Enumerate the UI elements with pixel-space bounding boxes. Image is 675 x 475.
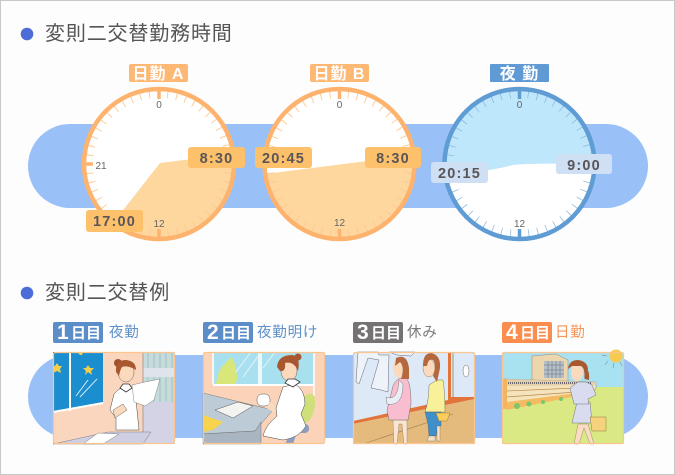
clock: day shift B: 12 xyxy=(334,218,345,229)
day 4 label: 4 xyxy=(506,321,518,344)
clock: day shift A: 日勤 A xyxy=(132,64,185,83)
heading: shift hours: 変則二交替勤務時間 xyxy=(45,22,233,45)
clock: day shift A: 12 xyxy=(153,219,165,230)
day 3 label: 日目 xyxy=(371,325,401,342)
day 2 label: 日目 xyxy=(221,325,251,342)
clock: night shift: 12 xyxy=(514,219,525,230)
day 1 label: 夜勤 xyxy=(109,324,140,341)
day 1 label: 1 xyxy=(57,321,69,344)
clock: night shift: 9:00 xyxy=(567,158,601,174)
day 2 label: 夜勤明け xyxy=(257,324,318,341)
illustration: day 1 nurse at night xyxy=(53,352,175,444)
day 4 label: 日勤 xyxy=(555,324,586,341)
clock: day shift B: 0 xyxy=(337,100,343,111)
day 4 label xyxy=(502,321,586,344)
day 1 label xyxy=(53,321,140,344)
clock: day shift A: 8:30 xyxy=(200,151,233,167)
illustration: day 3 window shopping xyxy=(353,352,475,444)
day 2 label: 2 xyxy=(207,321,219,344)
day 3 label: 3 xyxy=(357,321,369,344)
clock: day shift A: 0 xyxy=(156,100,162,111)
heading: examples: 変則二交替例 xyxy=(45,281,170,304)
clock: night shift: 20:15 xyxy=(438,166,481,182)
day 1 label: 日目 xyxy=(71,325,101,342)
background band: clocks xyxy=(28,124,648,208)
day 3 label: 休み xyxy=(407,324,438,341)
clock: night shift xyxy=(431,64,612,240)
clock: day shift A: 21 xyxy=(95,161,107,172)
clock: day shift B: 20:45 xyxy=(262,151,305,167)
day 3 label xyxy=(353,321,438,344)
clock: day shift A xyxy=(84,64,245,240)
clock: day shift B xyxy=(255,64,421,240)
illustration: day 4 walking to hospital xyxy=(502,350,624,444)
clock: night shift: 0 xyxy=(517,100,523,111)
clock: day shift B: 8:30 xyxy=(376,151,410,167)
day 4 label: 日目 xyxy=(520,325,550,342)
background band: days xyxy=(28,355,648,438)
clock: day shift B: 日勤 B xyxy=(313,64,366,83)
day 2 label xyxy=(203,321,318,344)
illustration: day 2 nurse resting xyxy=(203,352,325,444)
clock: day shift A: 17:00 xyxy=(93,214,136,230)
clock: night shift: 夜 勤 xyxy=(500,64,539,83)
